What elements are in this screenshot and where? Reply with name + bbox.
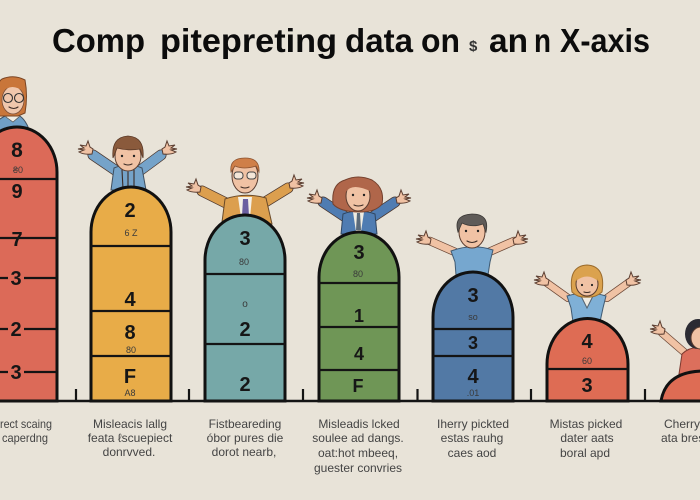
bar 2: yellow: F [124, 366, 136, 388]
bar 2: yellow: 80 [126, 345, 136, 355]
bar 2: yellow: 2 [124, 200, 136, 222]
label: bar 4 [312, 417, 404, 475]
label: bar 3: dorot nearb, [212, 445, 276, 459]
label: bar 4: Misleadis lcked [318, 417, 400, 431]
title: X-axis [560, 22, 650, 59]
title: on [421, 22, 460, 59]
bar 6: red: 60 [582, 356, 592, 366]
label: bar 2: feata ℓscuepiect [88, 431, 173, 445]
label: bar 5: estas rauhg [441, 431, 503, 445]
bar 4: green: F [352, 376, 364, 396]
bar 2: yellow: 8 [124, 322, 136, 344]
bar 4: green: 4 [354, 344, 364, 364]
label: bar 7 [661, 417, 700, 445]
label: bar 7: Cherry [664, 417, 700, 431]
bar 1: red: 9 [11, 181, 23, 203]
bar 3: teal: 80 [239, 257, 249, 267]
bar 4: green: 3 [353, 242, 365, 264]
figure: man with glasses in orange suit [186, 158, 304, 224]
bar 5: blue: 3 [468, 333, 478, 353]
title: n [534, 22, 551, 59]
label: bar 4: guester convries [314, 461, 402, 475]
figure: boy in blue t-shirt [416, 214, 528, 275]
label: bar 6 [550, 417, 622, 460]
title: $ [469, 38, 478, 55]
bar 5: blue: .01 [467, 388, 479, 398]
bar 1: red: ₴0 [13, 165, 23, 175]
bar 2: yellow: A8 [124, 388, 136, 398]
bar 5: blue [433, 272, 513, 401]
bar 1: red [0, 127, 57, 401]
title: Comp [52, 22, 145, 59]
bar 3: teal: 3 [239, 228, 251, 250]
label: bar 6: boral apd [560, 446, 610, 460]
bar 1: red: 7 [11, 229, 23, 251]
title: data [345, 22, 414, 59]
bar 5: blue: 3 [467, 285, 479, 307]
bar 4: green: 1 [354, 306, 364, 326]
label: bar 6: dater aats [560, 431, 614, 445]
label: bar 3 [207, 417, 284, 459]
x-axis with tick marks [0, 389, 700, 401]
label: bar 1: rect scaing [0, 417, 52, 431]
title [52, 22, 650, 59]
label: bar 5: caes aod [448, 446, 496, 460]
bar 3: teal: 2 [239, 319, 251, 341]
bar 3: teal [205, 215, 285, 401]
label: bar 2: donrvved. [103, 445, 155, 459]
label: bar 4: soulee ad dangs. [312, 431, 404, 445]
bar 7: red, cut off at edge [661, 371, 700, 401]
bar 1: red: 2 [10, 319, 22, 341]
bar 2: yellow: 4 [124, 289, 136, 311]
bar 6: red: 3 [581, 375, 593, 397]
bar 3: teal: 2 [239, 374, 251, 396]
bar 2: yellow [91, 187, 171, 401]
figure: woman in blue suit [307, 177, 411, 234]
figure: boy in blue shirt [78, 136, 177, 190]
bar 4: green [319, 232, 399, 401]
bar 3: teal: o [242, 299, 248, 310]
bar 5: blue: 4 [467, 366, 479, 388]
label: bar 5: Iherry pickted [437, 417, 509, 431]
bar 1: red: 3 [10, 268, 22, 290]
bar 2: yellow: 6 Z [124, 228, 138, 238]
bar 4: green: 80 [353, 269, 363, 279]
label: bar 2: Misleacis lallg [93, 417, 167, 431]
bar 5: blue: so [468, 312, 478, 322]
label: bar 1: caperdng [2, 431, 48, 445]
figure: girl with dark hair, cut off at edge [650, 319, 700, 374]
label: bar 5 [437, 417, 509, 460]
label: bar 4: oat:hot mbeeq, [318, 446, 398, 460]
figure: girl with blonde bob [534, 265, 641, 322]
bar 1: red: 3 [10, 362, 22, 384]
label: bar 6: Mistas picked [550, 417, 622, 431]
bar 6: red: 4 [581, 331, 593, 353]
figure: woman with glasses [0, 77, 30, 134]
label: bar 3: Fistbeareding [209, 417, 281, 431]
label: bar 1 [0, 417, 52, 445]
label: bar 3: óbor pures die [207, 431, 284, 445]
title: pitepreting [160, 22, 337, 59]
label: bar 2 [88, 417, 173, 459]
title: an [489, 22, 528, 59]
bar 1: red: 8 [11, 139, 23, 162]
bar 6: red [547, 318, 628, 401]
